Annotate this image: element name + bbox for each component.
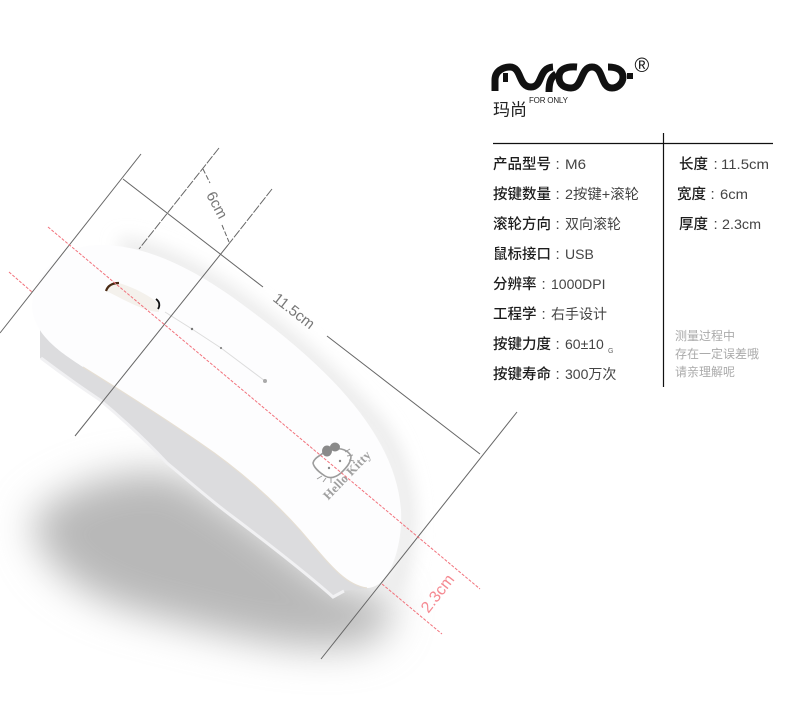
spec: model: : [556, 156, 560, 173]
spec: interface: 鼠标接口 [493, 246, 551, 263]
mouse shell seam [83, 367, 367, 588]
width measure ticks [203, 169, 229, 242]
spec: ergonomics: 右手设计 [551, 306, 607, 322]
length extension line right [321, 412, 517, 659]
spec: resolution: 分辨率 [493, 276, 536, 293]
width extension line top [139, 148, 219, 249]
size: thickness: 2.3cm [722, 216, 761, 232]
measurement note: 存在一定误差哦 [675, 346, 759, 361]
brand name chinese: 玛尚 [493, 100, 527, 120]
label: 11.5cm: 11.5cm [270, 290, 318, 333]
spec: wheel direction: : [556, 216, 560, 233]
spec: key force: : [556, 336, 560, 353]
size: width [677, 185, 748, 203]
spec: ergonomics: 工程学 [493, 305, 536, 323]
spec: wheel direction: 双向滚轮 [565, 216, 621, 232]
spec: key force: 60±10 [565, 336, 604, 352]
table rules [493, 133, 773, 387]
spec: key force: 按键力度 [493, 335, 551, 353]
measurement note: 测量过程中 [675, 328, 735, 343]
spec: buttons: : [556, 186, 560, 203]
measurement note [675, 328, 759, 379]
size: width: 6cm [720, 186, 748, 202]
spec: key life: : [556, 366, 560, 383]
size: width: : [710, 186, 715, 203]
mouse top shell [32, 245, 401, 588]
spec: key life: 按键寿命 [493, 365, 551, 383]
size: length: 11.5cm [721, 156, 769, 172]
brand logo [493, 55, 650, 120]
spec: ergonomics: : [542, 306, 546, 323]
spec: wheel direction: 滚轮方向 [493, 215, 551, 233]
spec: model [493, 156, 586, 173]
dimension lines [0, 148, 517, 659]
spec: interface [493, 246, 594, 263]
spec: buttons: 按键数量 [493, 185, 551, 203]
height dimension red lines [9, 227, 480, 634]
size: length: 长度 [679, 156, 708, 173]
spec: buttons: 2按键+滚轮 [565, 186, 639, 202]
size: length: : [714, 156, 718, 173]
spec: resolution [493, 276, 605, 293]
size: thickness [679, 216, 761, 233]
spec: buttons [493, 185, 639, 203]
brand name latin: FOR ONLY [529, 96, 569, 105]
size: length [679, 156, 769, 173]
mouse cast shadow [32, 246, 406, 648]
size: thickness: : [714, 216, 718, 233]
width extension line bottom [228, 189, 272, 245]
spec: resolution: 1000DPI [551, 276, 605, 292]
spec: key force: G [608, 348, 613, 355]
size: thickness: 厚度 [679, 216, 708, 233]
mouse product photo [32, 245, 401, 597]
button seam [165, 312, 267, 383]
length measure line [123, 179, 480, 454]
spec: resolution: : [542, 276, 546, 293]
size: width: 宽度 [677, 185, 706, 203]
spec: wheel direction [493, 215, 621, 233]
spec: key life [493, 365, 616, 383]
spec: key force [493, 335, 613, 355]
label: 6cm: 6cm [202, 189, 231, 222]
scroll wheel slot [106, 283, 159, 312]
registered mark: ® [634, 55, 650, 77]
spec: interface: : [556, 246, 560, 263]
spec list left column [493, 156, 639, 383]
mouse side base [40, 330, 367, 597]
hello kitty face [313, 442, 354, 483]
spec: ergonomics [493, 305, 607, 323]
label: 2.3cm: 2.3cm [418, 572, 458, 616]
logo wave mark [495, 67, 623, 92]
size list right column [677, 156, 769, 233]
hello kitty wordmark: Hello Kitty [320, 448, 374, 503]
measurement note: 请亲理解呢 [675, 365, 735, 379]
spec: key life: 300万次 [565, 366, 616, 382]
length extension line left [0, 154, 141, 333]
spec: interface: USB [565, 246, 594, 262]
spec: model: M6 [565, 156, 586, 172]
spec: model: 产品型号 [493, 156, 551, 173]
